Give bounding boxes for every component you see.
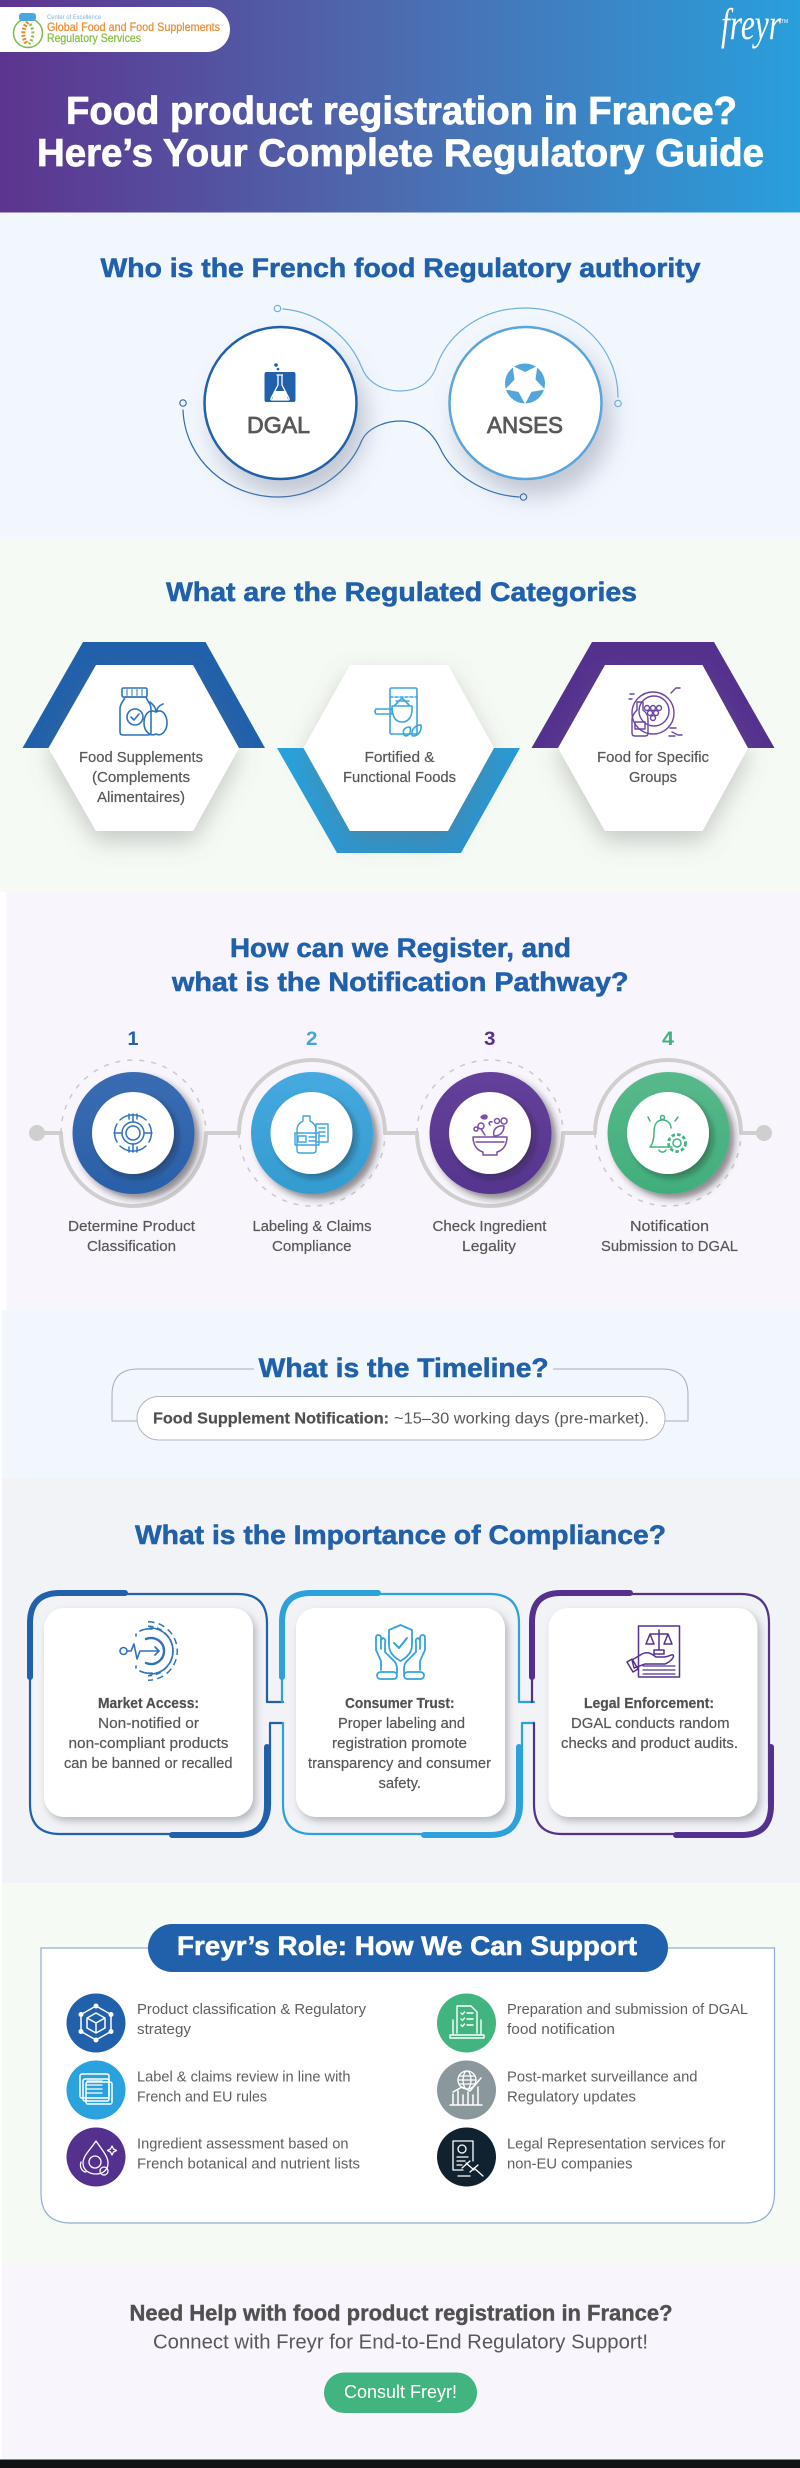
step 4: Notification <box>630 1218 709 1235</box>
heading: compliance: What is the Importance of Compliance? <box>135 1520 666 1550</box>
icon: bell and gear <box>648 1116 686 1152</box>
card: legal enforcement: Legal Enforcement: <box>584 1695 714 1712</box>
button: Consult Freyr: Consult Freyr! <box>344 2382 457 2402</box>
heading: timeline: What is the Timeline? <box>259 1353 549 1383</box>
timeline pill <box>137 1396 665 1440</box>
CTA subheading: Connect with Freyr for End-to-End Regulatory Support! <box>153 2332 648 2354</box>
connector curves <box>180 305 621 500</box>
support item: legal representation <box>437 2128 726 2186</box>
icon: ingredient bowl <box>473 1115 507 1155</box>
panel: Freyr's role <box>2 1883 800 2263</box>
title <box>37 90 764 175</box>
logo pill: center of excellence: Global Food and Food Supplements <box>47 20 220 34</box>
step 3 <box>430 1029 552 1255</box>
heading pill: how we can support: Freyr’s Role: How We Can Support <box>177 1931 637 1961</box>
icon: label bottle <box>295 1116 328 1153</box>
card: fortified and functional foods: Functional Foods <box>343 769 456 786</box>
icon: cube network <box>78 2004 114 2042</box>
card: DGAL <box>204 327 356 479</box>
panel: header <box>0 0 800 212</box>
icon: laptop checklist <box>450 2006 484 2038</box>
card: food for specific groups <box>532 642 774 831</box>
panel: notification pathway <box>6 892 800 1310</box>
card: food supplements: Alimentaires) <box>97 789 185 806</box>
card: consumer trust: Proper labeling and <box>338 1715 465 1732</box>
step 2: 2 <box>306 1029 318 1050</box>
icon: DGAL flask <box>264 363 296 402</box>
card: ANSES: ANSES <box>487 412 563 438</box>
card: food supplements: Food Supplements <box>79 749 203 766</box>
card: market access: Non-notified or <box>98 1715 199 1732</box>
card: fortified and functional foods <box>277 665 520 853</box>
icon: ANSES star <box>505 364 545 404</box>
heading: categories: What are the Regulated Categories <box>166 577 637 607</box>
card: consumer trust <box>282 1593 534 1835</box>
icon: document and gavel <box>453 2141 483 2176</box>
icon: scoop and pouch <box>375 688 421 736</box>
step 1: Classification <box>87 1238 176 1255</box>
step 1: 1 <box>128 1029 139 1050</box>
step 4: Submission to DGAL <box>601 1238 738 1255</box>
card: market access: Market Access: <box>98 1695 199 1712</box>
card: market access: can be banned or recalled <box>64 1755 232 1772</box>
card: legal enforcement: DGAL conducts random <box>571 1715 730 1732</box>
icon: stacked labels <box>80 2074 112 2104</box>
support item: product classification: Product classification & Regulatory <box>137 2001 366 2018</box>
button: Consult Freyr <box>324 2372 477 2413</box>
support item: label and claims review <box>66 2060 350 2120</box>
card: consumer trust: safety. <box>378 1775 421 1792</box>
logo pill: center of excellence: Center of Excellence <box>47 14 101 21</box>
support item: label and claims review: Label & claims review in line with <box>137 2068 350 2086</box>
icon: classification target <box>114 1114 152 1152</box>
card: fortified and functional foods: Fortified & <box>364 749 434 766</box>
card: ANSES <box>450 327 602 479</box>
heading: pathway <box>171 933 628 997</box>
heading pill: how we can support <box>148 1924 668 1972</box>
support item: DGAL notification <box>437 1994 748 2052</box>
heading: pathway: How can we Register, and <box>230 933 571 963</box>
icon: shield and hands <box>376 1625 425 1679</box>
support item: label and claims review: French and EU rules <box>137 2088 267 2106</box>
support item: ingredient assessment: French botanical and nutrient lists <box>137 2156 360 2172</box>
card: consumer trust: Consumer Trust: <box>345 1695 454 1712</box>
support item: post-market surveillance: Post-market surveillance and <box>507 2068 698 2086</box>
icon: wine and grapes <box>629 688 682 736</box>
card: food supplements <box>22 642 265 831</box>
card: DGAL: DGAL <box>247 412 310 438</box>
support item: product classification: strategy <box>137 2021 192 2038</box>
support item: legal representation: non-EU companies <box>507 2156 632 2172</box>
heading: pathway: what is the Notification Pathway? <box>171 967 628 997</box>
card: consumer trust: registration promote <box>332 1735 467 1752</box>
support item: ingredient assessment <box>66 2128 360 2186</box>
support item: ingredient assessment: Ingredient assessment based on <box>137 2136 348 2152</box>
step 2 <box>251 1029 373 1255</box>
support item: DGAL notification: food notification <box>507 2021 615 2038</box>
step 3: Check Ingredient <box>432 1218 547 1235</box>
icon: market gear <box>120 1624 175 1678</box>
panel: French food regulatory authority <box>0 212 800 537</box>
logo pill: center of excellence <box>0 7 230 52</box>
heading: authority: Who is the French food Regulatory authority <box>100 253 700 283</box>
CTA heading: Need Help with food product registration in France? <box>130 2300 672 2326</box>
timeline pill: Food Supplement Notification: <box>153 1410 389 1428</box>
icon: legal document <box>627 1626 680 1677</box>
step 1 <box>68 1029 196 1255</box>
title: Food product registration in France? <box>66 90 737 133</box>
step 4 <box>601 1029 738 1255</box>
card: legal enforcement <box>532 1593 771 1835</box>
support frame <box>41 1948 774 2223</box>
icon: droplet and magnifier <box>80 2141 116 2175</box>
step 3: 3 <box>484 1029 496 1050</box>
logo pill: center of excellence: Regulatory Services <box>47 31 141 45</box>
step 2: Labeling & Claims <box>252 1218 372 1235</box>
icon: bottle and apple <box>120 688 167 735</box>
timeline bracket <box>112 1369 688 1421</box>
card: market access: non-compliant products <box>68 1735 228 1752</box>
support item: post-market surveillance: Regulatory updates <box>507 2088 636 2106</box>
support item: legal representation: Legal Representation services for <box>507 2136 726 2152</box>
panel: importance of compliance <box>2 1478 800 1883</box>
support item: product classification <box>66 1994 366 2052</box>
card: market access <box>30 1593 283 1835</box>
step 2: Compliance <box>272 1238 352 1255</box>
support item: post-market surveillance <box>437 2060 698 2120</box>
step 3: Legality <box>462 1238 517 1255</box>
icon: globe and bars <box>450 2071 482 2105</box>
timeline pill: ~15–30 working days (pre-market). <box>394 1410 649 1428</box>
freyr logo: TM <box>781 19 788 25</box>
card: food for specific groups: Food for Specific <box>597 749 709 766</box>
title: Here’s Your Complete Regulatory Guide <box>37 132 764 175</box>
card: food supplements: (Complements <box>92 769 190 786</box>
support item: DGAL notification: Preparation and submission of DGAL <box>507 2001 748 2018</box>
card: legal enforcement: checks and product audits. <box>561 1735 738 1752</box>
pathway track <box>29 1060 772 1206</box>
panel: call to action <box>2 2263 800 2459</box>
step 4: 4 <box>662 1029 674 1050</box>
panel: regulated categories <box>0 537 800 892</box>
card: food for specific groups: Groups <box>629 769 677 786</box>
step 1: Determine Product <box>68 1218 196 1235</box>
card: consumer trust: transparency and consumer <box>308 1755 491 1772</box>
panel: timeline <box>2 1310 800 1478</box>
